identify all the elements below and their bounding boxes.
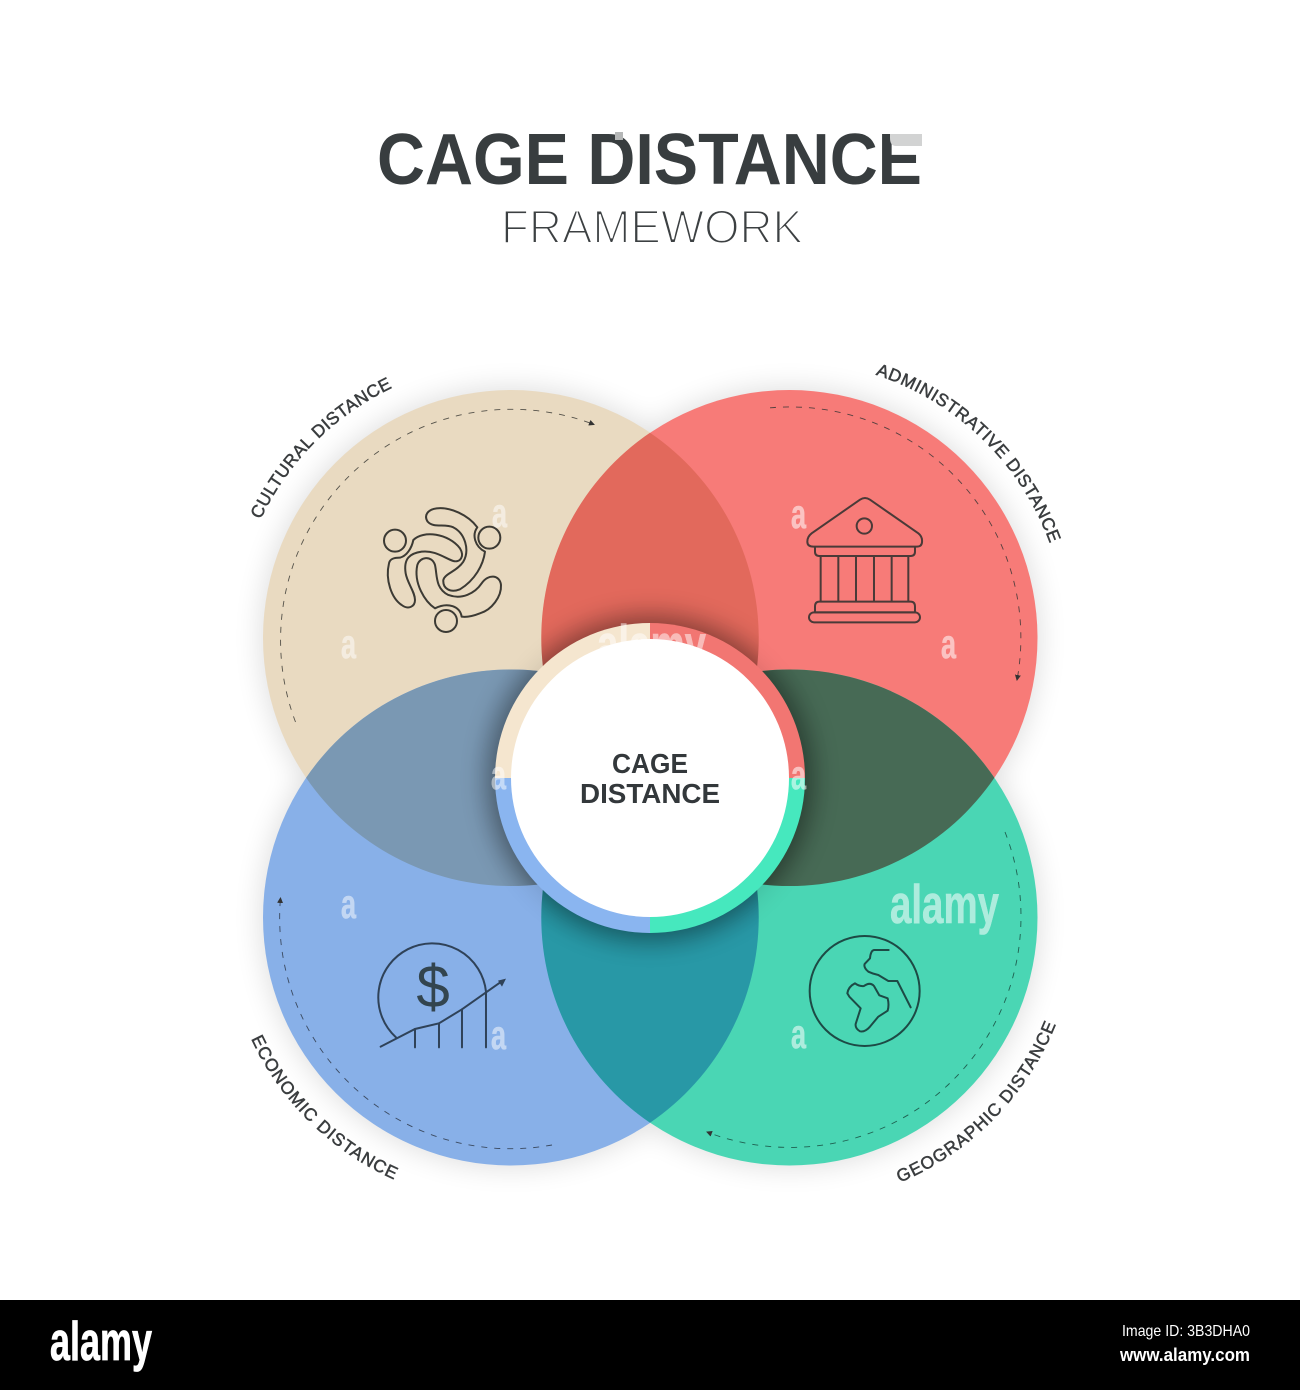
ring: cream quarter	[495, 623, 650, 778]
watermarks: a	[791, 491, 807, 537]
circle: administrative	[542, 390, 1038, 886]
overlap: top	[541, 433, 759, 843]
watermarks: a	[492, 490, 508, 536]
label: economic distance: ECONOMIC DISTANCE	[251, 1034, 398, 1180]
watermarks: a	[941, 621, 957, 667]
label: administrative distance: ADMINISTRATIVE DISTANCE	[875, 364, 1061, 543]
dashed arrow: geographic	[707, 832, 1021, 1147]
dashed arrow: cultural	[281, 409, 594, 722]
overlap: bottom	[541, 712, 759, 1123]
ring: red quarter	[650, 623, 805, 778]
footer image id: Image ID: 3B3DHA0	[1122, 1323, 1250, 1340]
circle: cultural	[263, 390, 759, 886]
icon: dollar growth chart	[378, 943, 506, 1047]
footer url: www.alamy.com	[1119, 1345, 1250, 1365]
watermarks: a	[341, 621, 357, 667]
center label: DISTANCE	[580, 778, 720, 809]
watermarks	[341, 490, 999, 1058]
watermarks: a	[491, 1012, 507, 1058]
title: CAGE DISTANCE	[377, 120, 922, 200]
label: cultural distance: CULTURAL DISTANCE	[252, 377, 392, 518]
ring: blue quarter	[495, 778, 650, 933]
watermarks: a	[491, 752, 507, 798]
panel: venn diagram	[263, 390, 1038, 1166]
icon: people swirl	[384, 508, 501, 632]
dashed arrow: administrative	[770, 407, 1021, 680]
icon: globe	[810, 936, 920, 1046]
circle: economic	[263, 670, 759, 1166]
watermarks: a	[341, 881, 357, 927]
footer logo: alamy	[50, 1310, 152, 1372]
watermarks: a	[791, 752, 807, 798]
watermarks: alamy	[597, 613, 706, 675]
center label	[580, 748, 720, 809]
center label: CAGE	[612, 748, 688, 779]
center ring	[495, 623, 805, 933]
footer bar	[0, 1300, 1300, 1390]
subtitle: FRAMEWORK	[501, 200, 803, 253]
overlap: left	[306, 669, 716, 886]
watermarks: alamy	[890, 873, 999, 935]
overlap: right	[585, 669, 994, 886]
center disc	[511, 639, 789, 917]
ring outer shadow	[493, 623, 807, 937]
circle: geographic	[542, 670, 1038, 1166]
icon: institution building	[807, 498, 922, 622]
label: geographic distance: GEOGRAPHIC DISTANCE	[897, 1020, 1056, 1181]
ring: green quarter	[650, 778, 805, 933]
watermarks: a	[791, 1011, 807, 1057]
ring soft shadow	[487, 615, 813, 941]
icon: dollar sign: $	[416, 953, 450, 1020]
dashed arrow: economic	[280, 898, 552, 1149]
circle drop shadows	[261, 388, 1040, 1168]
